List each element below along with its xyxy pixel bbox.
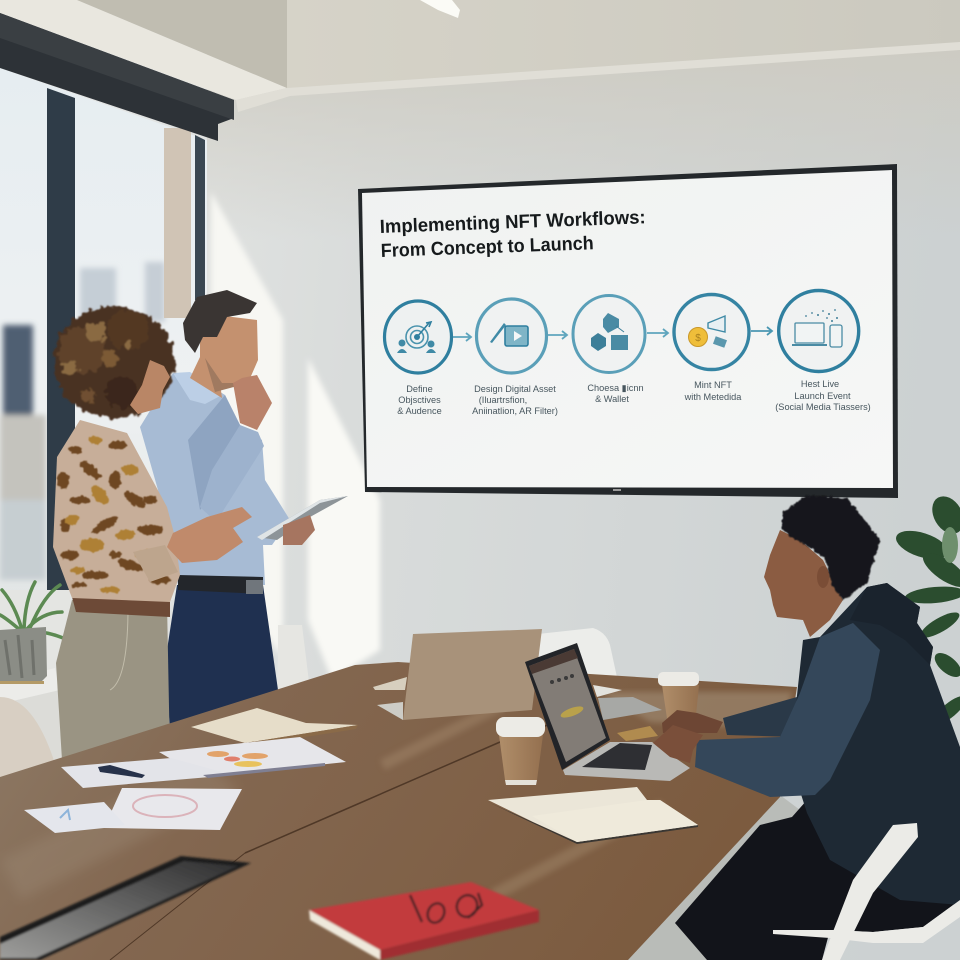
stray notebook on table far end: [373, 677, 407, 690]
white chair behind table: [538, 628, 618, 682]
paper far side: [593, 685, 622, 697]
icon: potted plant on sill: [0, 582, 68, 684]
papers with sketches: [24, 737, 346, 833]
floor under table: [610, 795, 800, 960]
window with city view: [0, 68, 207, 600]
ear: [817, 566, 829, 588]
person: man with tablet: [140, 290, 348, 730]
step labels: [397, 379, 871, 416]
belt: [72, 597, 170, 617]
step labels: (Social Media Tiassers): [775, 402, 871, 412]
potted plant right: [893, 491, 960, 728]
wall-mounted display: [358, 164, 898, 498]
far sleeve: [723, 697, 797, 737]
slide title: From Concept to Launch: [380, 233, 594, 262]
trousers: [165, 585, 278, 730]
arrow 1: [453, 333, 471, 341]
sunlight patches on wall: [211, 192, 380, 690]
hands: [662, 710, 723, 733]
hood: [850, 583, 933, 665]
laptop facing away: [377, 629, 542, 720]
window sill and cabinet: [0, 590, 310, 770]
hair: [782, 495, 880, 600]
arrow 2: [548, 331, 567, 339]
step labels: (Iluartrsfion,: [479, 395, 527, 405]
step labels: Design Digital Asset: [474, 384, 556, 394]
step labels: Mint NFT: [694, 380, 732, 390]
red notebook with glasses: [309, 882, 539, 960]
step 1: define objectives: [384, 301, 452, 373]
near sleeve: [695, 623, 880, 797]
coffee cup far: [658, 672, 699, 725]
step labels: & Audence: [397, 406, 442, 416]
window blind: [0, 13, 234, 141]
hair: [183, 290, 257, 353]
trousers: [56, 600, 170, 760]
step labels: & Wallet: [595, 394, 629, 404]
step labels: with Metedida: [684, 392, 742, 402]
neck and face: [764, 530, 843, 637]
blouse: [53, 420, 180, 602]
ceiling and soffit: [0, 0, 960, 112]
forearm and hand: [167, 507, 252, 563]
hand on tablet: [283, 515, 315, 545]
coffee cup near: [496, 717, 545, 785]
arrow 3: [647, 329, 668, 337]
neck and face: [190, 313, 258, 398]
hand at chin: [233, 375, 272, 430]
raised sleeve: [200, 425, 264, 522]
step labels: Launch Event: [794, 391, 851, 401]
slide title: Implementing NFT Workflows:: [379, 207, 646, 238]
belt: [178, 575, 263, 594]
step 2: design digital asset: [476, 299, 546, 373]
open notebook on table: [191, 708, 358, 747]
trousers: [675, 800, 960, 960]
slide title: [379, 207, 646, 262]
hoodie torso: [790, 583, 960, 905]
step labels: Objsctives: [398, 395, 441, 405]
step 4: mint NFT: $: [695, 333, 701, 344]
open notebook near: [488, 787, 698, 844]
phone on table: [617, 726, 658, 741]
wood seams and highlights: [0, 692, 792, 960]
beige chair left foreground: [0, 697, 57, 778]
step 3: choose platform and wallet: [573, 296, 645, 372]
curly hair: [53, 306, 175, 418]
person: seated man in hoodie: [653, 495, 960, 960]
step labels: Aniinatlion, AR Filter): [472, 406, 558, 416]
step 5: host live launch event: [779, 290, 859, 372]
blouse print: [57, 436, 171, 593]
tablet: [257, 496, 348, 540]
white chair foreground: [773, 823, 960, 960]
step labels: Hest Live: [801, 379, 839, 389]
pen: [98, 765, 145, 778]
open laptop: [525, 643, 690, 781]
person: woman in patterned blouse: [53, 306, 252, 760]
arrow 4: [751, 327, 772, 335]
dark tablet foreground: [0, 856, 251, 960]
closed tablet far side: [598, 697, 662, 720]
meeting table: [0, 662, 797, 960]
step labels: Define: [406, 384, 433, 394]
step 4: mint NFT: [674, 294, 749, 370]
shirt: [140, 373, 290, 585]
face: [130, 360, 170, 414]
step labels: Choesa ▮icnn: [587, 383, 644, 393]
